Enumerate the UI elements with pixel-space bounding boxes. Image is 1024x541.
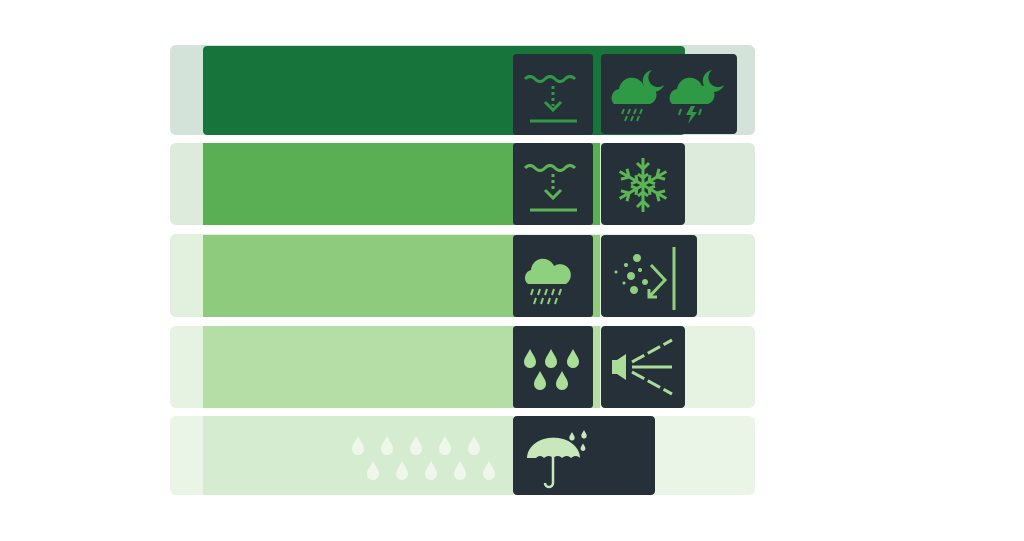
icon: spray nozzle [601, 326, 685, 408]
row 2 [170, 143, 755, 225]
row 3 [170, 234, 755, 317]
row 5 [170, 416, 755, 495]
icon: rain cloud [513, 235, 593, 317]
decorative drops [352, 436, 495, 480]
icon: drops [513, 326, 593, 408]
row 4 [170, 326, 755, 408]
icon: night rain and thunder clouds [601, 54, 737, 134]
icon: snowflake [601, 143, 685, 225]
row 1 [170, 45, 755, 135]
icon: umbrella [513, 416, 655, 495]
icon: water level arrow [513, 143, 593, 225]
icon: water level arrow [513, 54, 593, 135]
icon: particles deflecting off barrier [601, 235, 697, 317]
